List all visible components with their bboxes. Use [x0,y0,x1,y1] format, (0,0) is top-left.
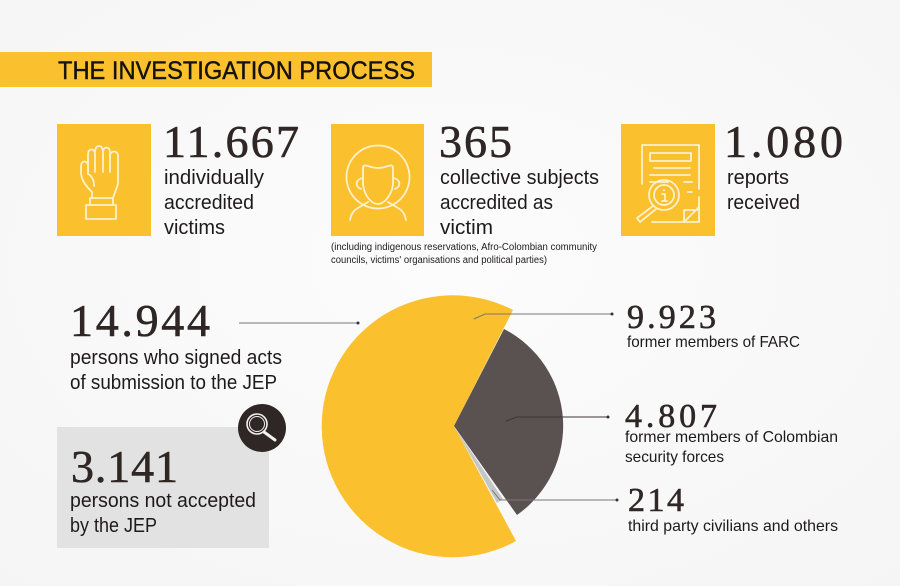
text: former members of FARC: former members of FARC [627,334,800,351]
text: persons who signed acts of submission to the JEP: of submission to the JEP [70,372,277,394]
text: persons who signed acts of submission to the JEP: persons who signed acts [70,347,282,369]
leader line [474,312,614,319]
text: third party civilians and others: third party civilians and others [628,518,838,535]
panel: reports received [621,116,843,236]
heading: the investigation process: THE INVESTIGATION PROCESS [58,57,415,85]
slice: former members of FARC [322,295,516,557]
leader line [492,490,618,502]
text: reports received: received [727,192,800,214]
slice: third party civilians [454,426,503,503]
note: including indigenous reservations: (including indigenous reservations, Afro-Colombian community [331,242,597,253]
text: former members of Colombian security forces: former members of Colombian [625,429,838,446]
icon: magnifier badge [238,404,286,452]
pie chart [322,295,563,557]
panel: persons who signed acts of submission [70,295,360,394]
text: individually accredited victims: victims [164,217,225,239]
note: including indigenous reservations: councils, victims' organisations and political parties) [331,255,547,266]
callout: former members of Colombian security forces [506,398,842,466]
text: collective subjects accredited as victim: victim [440,217,493,239]
text: former members of Colombian security forces: security forces [625,449,724,466]
heading: the investigation process [0,52,432,87]
text: collective subjects accredited as victim: accredited as [440,192,553,214]
callout: third party civilians and others [492,482,838,535]
number: 365: 365 [439,116,512,167]
panel: persons not accepted by the JEP [57,427,269,548]
callout: former members of FARC [474,299,800,351]
text: individually accredited victims: individually [164,167,264,189]
icon: person with curly hair [331,124,424,236]
panel: individually accredited victims [57,116,299,239]
text: persons not accepted by the JEP: persons not accepted [70,490,256,512]
panel: collective subjects accredited as victim [331,116,605,266]
text: collective subjects accredited as victim: collective subjects [440,167,599,189]
number: 9.923: 9.923 [627,299,716,336]
number: 4.807: 4.807 [625,398,717,435]
number: 3.141: 3.141 [71,441,178,492]
text: persons not accepted by the JEP: by the JEP [70,515,157,537]
text: individually accredited victims: accredited [164,192,254,214]
leader line to pie [239,322,360,324]
leader line [506,416,610,421]
slice: former members of Colombian security forces [454,329,563,515]
number: 14.944: 14.944 [70,295,210,346]
icon: document with magnifier [621,124,715,236]
number: 214: 214 [628,482,684,519]
number: 11.667: 11.667 [163,116,299,167]
number: 1.080: 1.080 [724,116,843,167]
icon: raised hand [57,124,151,236]
text: reports received: reports [727,167,789,189]
